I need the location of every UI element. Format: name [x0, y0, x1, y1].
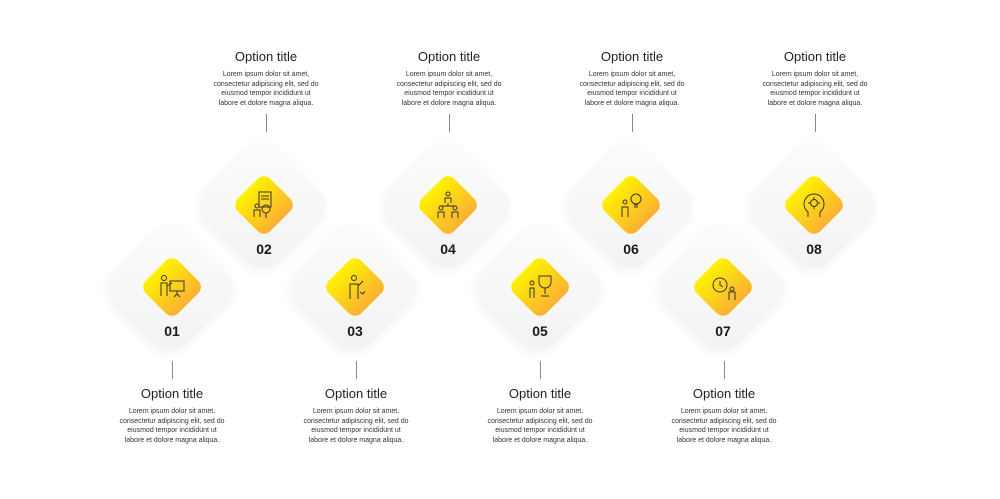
arrow 07: [724, 361, 725, 379]
text 05: Lorem ipsum dolor sit amet, consectetur adipiscing elit, sed do eiusmod tempor incididunt ut labore et dolore magna aliqua.: [487, 408, 593, 444]
text 08: Option title: [784, 49, 846, 64]
icon: head gear: [804, 194, 824, 217]
text 01: [119, 386, 225, 444]
plate 08: [743, 135, 885, 277]
icon: document search: [254, 192, 272, 218]
text 04: Lorem ipsum dolor sit amet, consectetur adipiscing elit, sed do eiusmod tempor incididunt ut labore et dolore magna aliqua.: [396, 71, 502, 107]
text 07: [671, 386, 777, 444]
number 04: 04: [440, 241, 456, 257]
text 04: [396, 49, 502, 107]
number 03: 03: [347, 323, 363, 339]
number 02: 02: [256, 241, 272, 257]
icon: achiever: [350, 275, 366, 299]
text 04: Option title: [418, 49, 480, 64]
text 01: Lorem ipsum dolor sit amet, consectetur adipiscing elit, sed do eiusmod tempor incididunt ut labore et dolore magna aliqua.: [119, 408, 225, 444]
icon diamond 04: [415, 172, 481, 238]
icon: idea: [622, 194, 642, 217]
icon diamond 01: [139, 254, 205, 320]
plate 02: [193, 135, 335, 277]
icon diamond 02: [231, 172, 297, 238]
icon diamond 03: [322, 254, 388, 320]
text 02: Option title: [235, 49, 297, 64]
text 05: Option title: [509, 386, 571, 401]
text 02: Lorem ipsum dolor sit amet, consectetur adipiscing elit, sed do eiusmod tempor incididunt ut labore et dolore magna aliqua.: [213, 71, 319, 107]
text 06: [579, 49, 685, 107]
number 05: 05: [532, 323, 548, 339]
text 03: Option title: [325, 386, 387, 401]
arrow 06: [632, 114, 633, 132]
arrow 04: [449, 114, 450, 132]
plate 04: [377, 135, 519, 277]
number 07: 07: [715, 323, 731, 339]
text 05: [487, 386, 593, 444]
text 02: [213, 49, 319, 107]
icon: trophy: [530, 276, 552, 298]
icon: presenter: [160, 275, 184, 298]
plate 06: [560, 135, 702, 277]
icon: clock: [712, 278, 736, 300]
arrow 05: [540, 361, 541, 379]
text 03: [303, 386, 409, 444]
plate 01: [101, 217, 243, 359]
icon diamond 05: [507, 254, 573, 320]
plate 05: [469, 217, 611, 359]
text 07: Lorem ipsum dolor sit amet, consectetur adipiscing elit, sed do eiusmod tempor incididunt ut labore et dolore magna aliqua.: [671, 408, 777, 444]
number 01: 01: [164, 323, 180, 339]
text 06: Option title: [601, 49, 663, 64]
icon diamond 08: [781, 172, 847, 238]
icon diamond 07: [690, 254, 756, 320]
text 07: Option title: [693, 386, 755, 401]
text 01: Option title: [141, 386, 203, 401]
plate 07: [652, 217, 794, 359]
number 08: 08: [806, 241, 822, 257]
arrow 03: [356, 361, 357, 379]
text 08: Lorem ipsum dolor sit amet, consectetur adipiscing elit, sed do eiusmod tempor incididunt ut labore et dolore magna aliqua.: [762, 71, 868, 107]
icon: team: [438, 192, 458, 218]
plate 03: [284, 217, 426, 359]
text 03: Lorem ipsum dolor sit amet, consectetur adipiscing elit, sed do eiusmod tempor incididunt ut labore et dolore magna aliqua.: [303, 408, 409, 444]
arrow 02: [266, 114, 267, 132]
icon diamond 06: [598, 172, 664, 238]
arrow 08: [815, 114, 816, 132]
text 08: [762, 49, 868, 107]
number 06: 06: [623, 241, 639, 257]
text 06: Lorem ipsum dolor sit amet, consectetur adipiscing elit, sed do eiusmod tempor incididunt ut labore et dolore magna aliqua.: [579, 71, 685, 107]
arrow 01: [172, 361, 173, 379]
